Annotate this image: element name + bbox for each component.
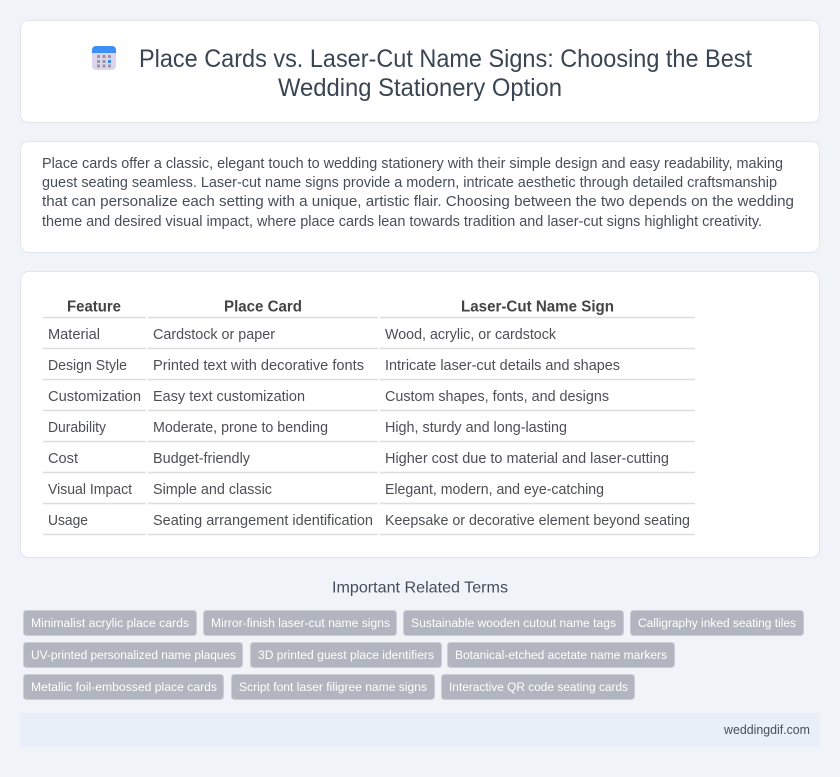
table row: customization: Customization	[48, 389, 141, 405]
table row: customization: Custom shapes, fonts, and designs	[385, 389, 609, 405]
tag	[24, 674, 224, 700]
tag	[250, 642, 442, 668]
text block: introduction: guest seating seamless. Laser-cut name signs provide a modern, intricate aesthetic through detailed craftsmanship	[42, 175, 777, 191]
tag: 3D printed guest place identifiers	[258, 648, 434, 662]
tag: Mirror-finish laser-cut name signs	[211, 616, 390, 630]
tag	[232, 674, 434, 700]
table row: cost: Higher cost due to material and laser-cutting	[385, 451, 669, 467]
table row: cost	[48, 451, 669, 467]
table header	[67, 298, 614, 316]
table row: usage: Seating arrangement identification	[153, 513, 373, 529]
tag: Calligraphy inked seating tiles	[638, 616, 796, 630]
tag	[24, 642, 242, 668]
related term tags	[24, 610, 804, 700]
table row: customization	[48, 389, 609, 405]
title	[139, 45, 752, 102]
tag	[448, 642, 674, 668]
table row: visual impact	[48, 482, 604, 498]
tag	[404, 610, 624, 636]
footer source label: weddingdif.com	[723, 723, 810, 737]
table row: visual impact: Visual Impact	[48, 482, 132, 498]
table row: design style	[48, 358, 620, 374]
table header: Feature	[67, 298, 121, 316]
title: Place Cards vs. Laser-Cut Name Signs: Choosing the Best	[139, 45, 752, 73]
header panel	[20, 20, 820, 122]
tag	[442, 674, 634, 700]
title: Wedding Stationery Option	[278, 74, 562, 102]
table row: durability: High, sturdy and long-lasting	[385, 420, 567, 436]
table row: material	[48, 327, 557, 343]
table row: durability: Moderate, prone to bending	[153, 420, 328, 436]
table row: design style: Printed text with decorative fonts	[153, 358, 364, 374]
footer	[20, 713, 820, 747]
tag: Script font laser filigree name signs	[239, 680, 427, 694]
tag: Metallic foil-embossed place cards	[31, 680, 217, 694]
table row: visual impact: Simple and classic	[153, 482, 272, 498]
tag: UV-printed personalized name plaques	[31, 648, 236, 662]
tag	[204, 610, 396, 636]
text block: introduction: that can personalize each setting with a unique, artistic flair. Choosing between the two depends on the wedding	[42, 194, 794, 210]
tag	[24, 610, 196, 636]
table row: usage: Keepsake or decorative element beyond seating	[385, 513, 690, 529]
panel: comparison table	[20, 272, 820, 558]
table row: durability	[48, 420, 567, 436]
table row: usage	[48, 513, 690, 529]
table row: material: Cardstock or paper	[153, 327, 275, 343]
tag: Minimalist acrylic place cards	[31, 616, 189, 630]
table row: customization: Easy text customization	[153, 389, 305, 405]
panel: introduction paragraph	[20, 142, 820, 252]
table row: durability: Durability	[48, 420, 107, 436]
table row: design style: Intricate laser-cut details and shapes	[385, 358, 620, 374]
tag	[630, 610, 804, 636]
table row: cost: Budget-friendly	[153, 451, 251, 467]
icon: calendar	[92, 46, 116, 70]
text block: introduction: theme and desired visual impact, where place cards lean towards tradition and laser-cut signs highlight creativity.	[42, 214, 762, 230]
table header: Place Card	[224, 298, 302, 316]
table row: visual impact: Elegant, modern, and eye-catching	[385, 482, 604, 498]
table row: usage: Usage	[48, 513, 88, 529]
tag: Sustainable wooden cutout name tags	[411, 616, 616, 630]
table header: Laser-Cut Name Sign	[461, 298, 614, 316]
tag: Interactive QR code seating cards	[449, 680, 628, 694]
text block: introduction	[42, 156, 794, 230]
table row: cost: Cost	[48, 451, 78, 467]
table row: material: Wood, acrylic, or cardstock	[385, 327, 557, 343]
table row: design style: Design Style	[48, 358, 127, 374]
text block: introduction: Place cards offer a classic, elegant touch to wedding stationery with their simple design and easy readability, making	[42, 156, 783, 172]
heading: important related terms: Important Related Terms	[332, 580, 508, 596]
table row: material: Material	[48, 327, 100, 343]
tag: Botanical-etched acetate name markers	[455, 648, 667, 662]
